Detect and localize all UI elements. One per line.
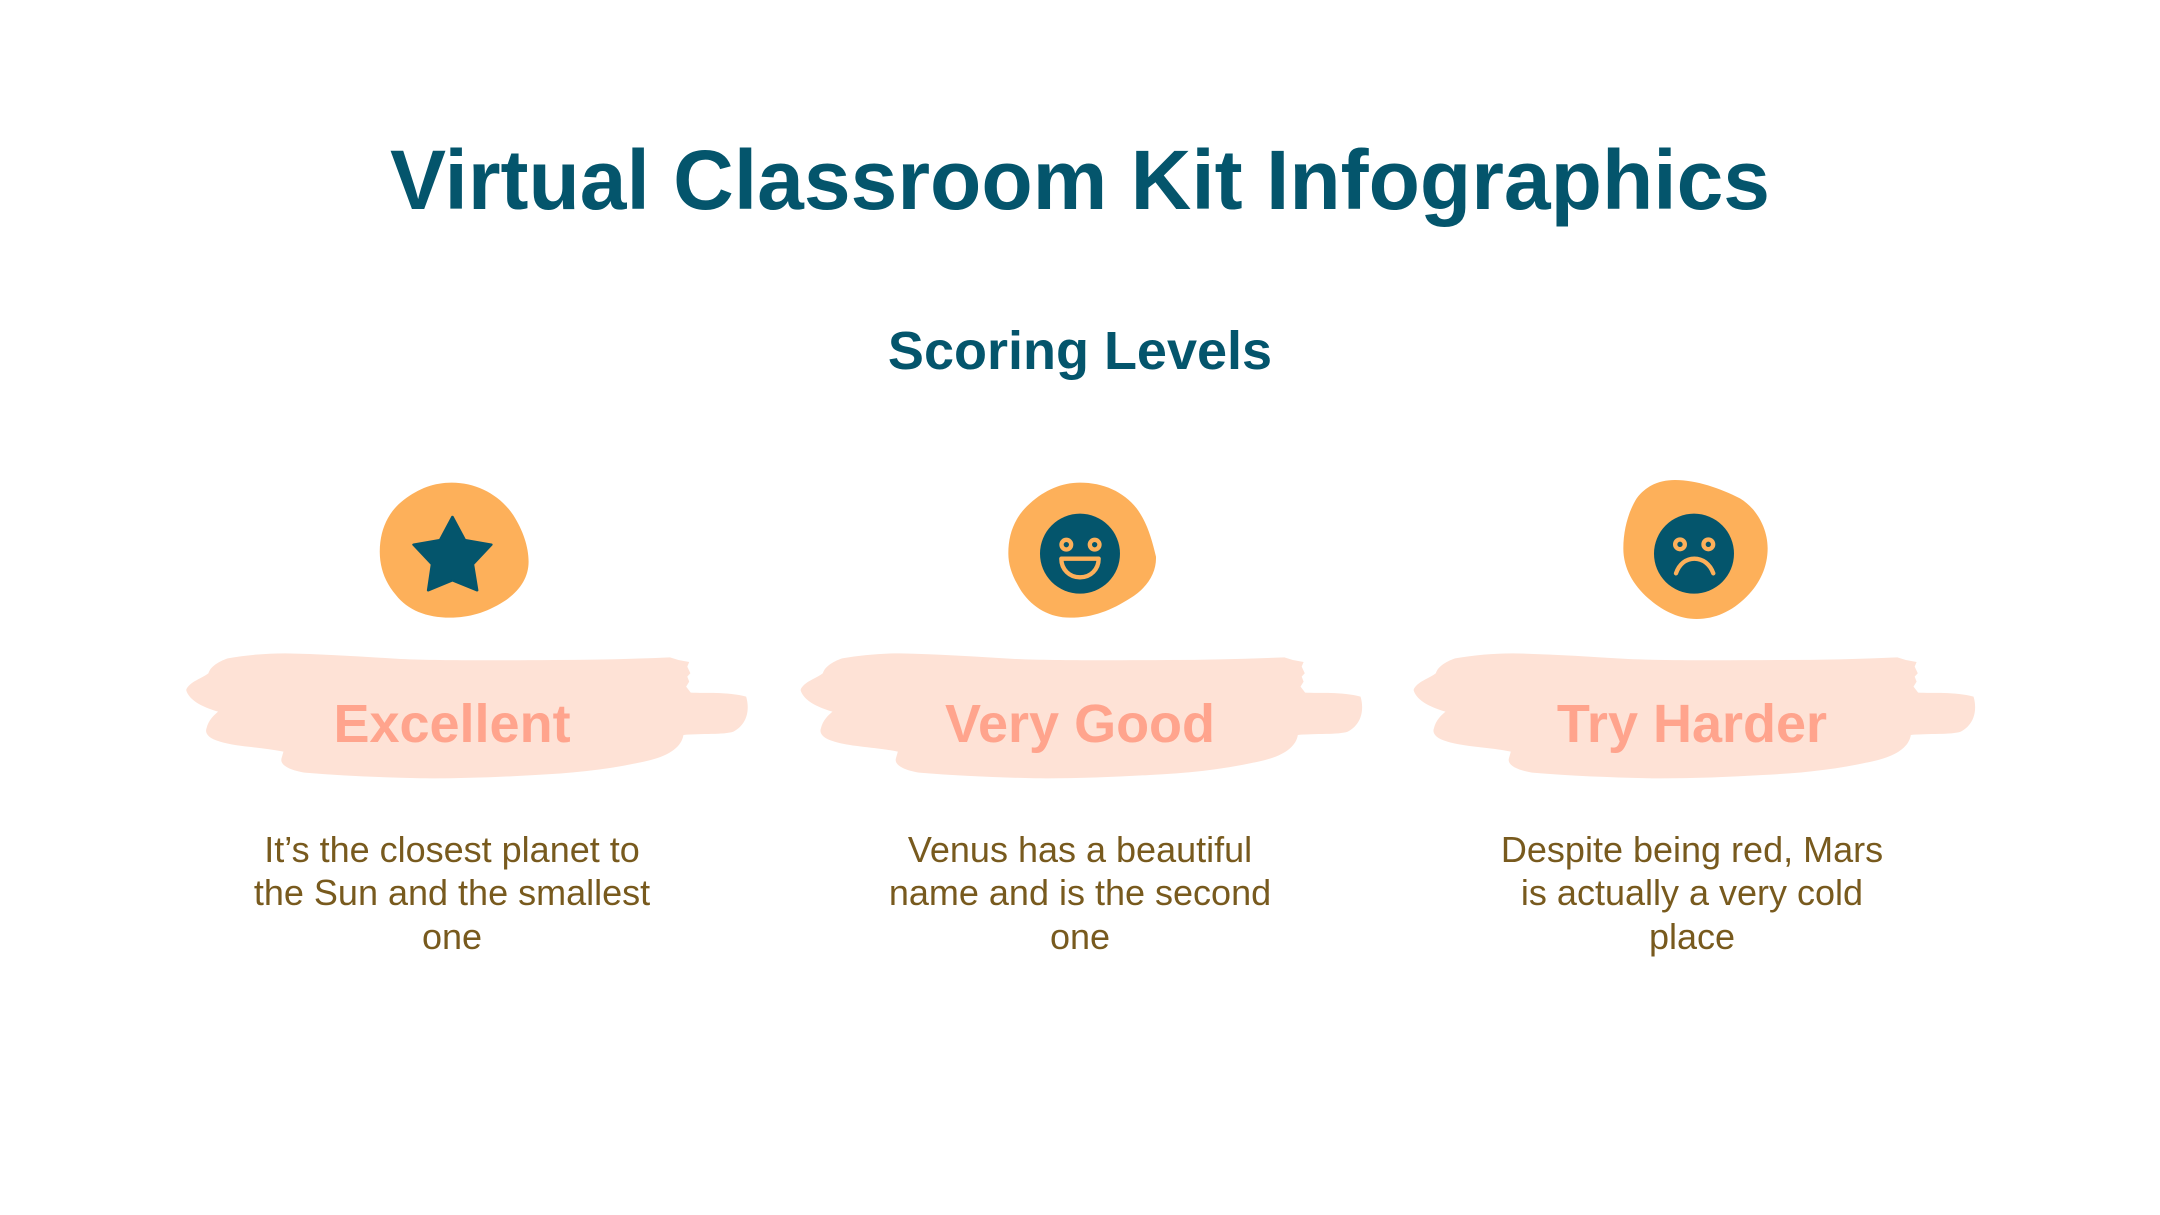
description: excellent: the Sun and the smallest bbox=[254, 872, 650, 913]
description: excellent: one bbox=[422, 916, 482, 957]
description: very good: one bbox=[1050, 916, 1110, 957]
panel: very good bbox=[801, 483, 1362, 957]
description: try harder: is actually a very cold bbox=[1521, 872, 1863, 913]
icon: star in orange blob bbox=[380, 483, 529, 618]
panel: try harder bbox=[1414, 480, 1975, 957]
label: try harder: Try Harder bbox=[1557, 694, 1827, 754]
brush stroke: excellent bbox=[186, 653, 748, 778]
label: excellent: Excellent bbox=[333, 694, 571, 754]
brush stroke: very good bbox=[801, 653, 1362, 778]
label: very good: Very Good bbox=[945, 694, 1215, 754]
description: try harder: place bbox=[1649, 916, 1735, 957]
description: very good: name and is the second bbox=[889, 872, 1271, 913]
title: Virtual Classroom Kit Infographics bbox=[390, 133, 1770, 227]
description: try harder: Despite being red, Mars bbox=[1501, 829, 1883, 870]
description: very good: Venus has a beautiful bbox=[908, 829, 1252, 870]
brush stroke: try harder bbox=[1414, 653, 1975, 778]
description: excellent: It’s the closest planet to bbox=[264, 829, 640, 870]
icon: sad face in orange blob bbox=[1623, 480, 1768, 619]
subtitle: Scoring Levels bbox=[888, 321, 1272, 381]
icon: happy face in orange blob bbox=[1008, 483, 1156, 618]
panel: excellent bbox=[186, 483, 748, 957]
